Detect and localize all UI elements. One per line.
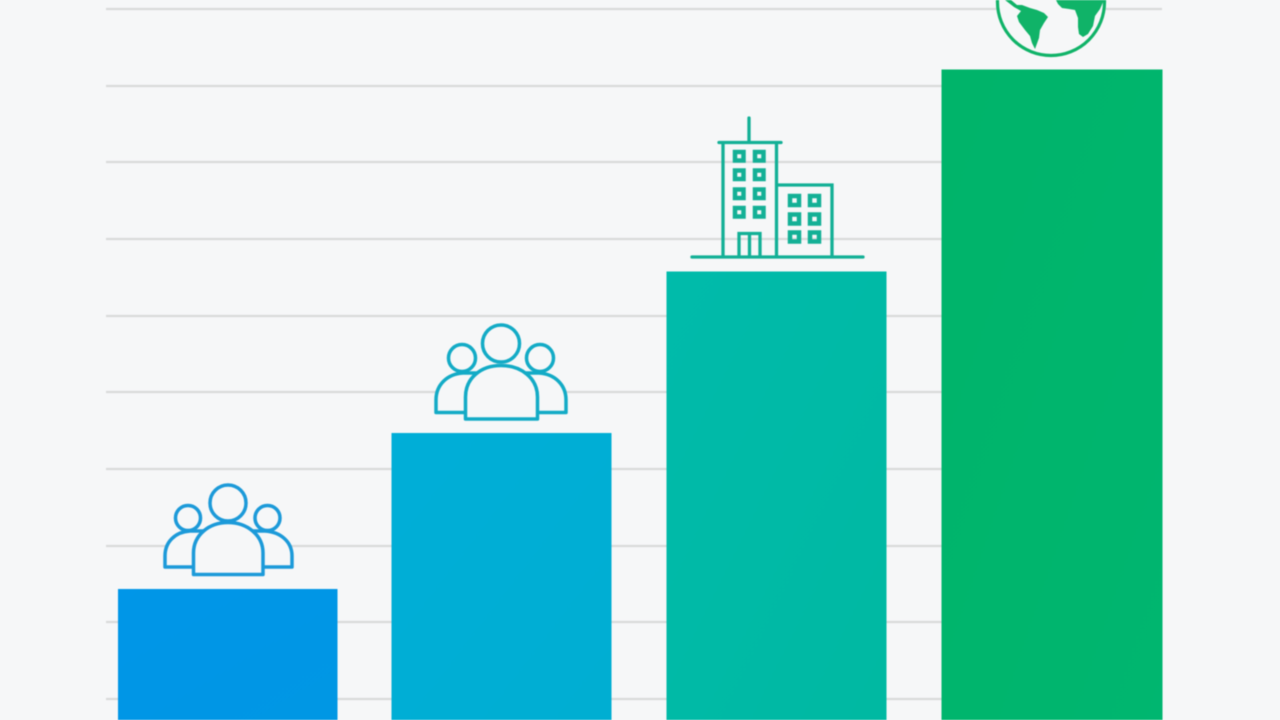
icon: city buildings: [692, 118, 863, 257]
bar 4: green: [942, 70, 1162, 720]
bar 1: blue: [118, 589, 338, 720]
bar 2: light blue: [392, 433, 612, 720]
icon: small group of people: [165, 485, 292, 574]
icon: globe: [998, 0, 1104, 56]
icon: larger group of people: [436, 325, 566, 419]
bar 3: teal: [666, 272, 886, 720]
